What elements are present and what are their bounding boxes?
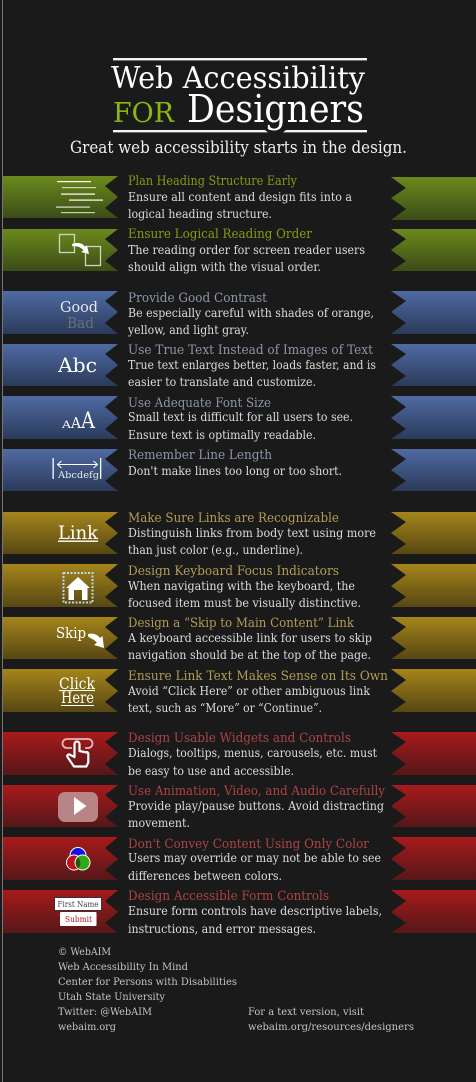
icon: growing letter A [61,409,96,434]
item: Use Animation, Video, and Audio: movement. [128,816,190,830]
item: Design Usable Widgets and Controls: Dialogs, tooltips, menus, carousels, etc. must [128,746,377,760]
footer: WebAIM credits: © WebAIM [58,947,111,958]
icon: click here link: Click [59,674,95,693]
item: Ensure Link Text Makes Sense: text, such as “More” or “Continue”. [128,701,322,715]
item: Ensure Logical Reading Order: Ensure Logical Reading Order [128,227,313,242]
footer: text version link: webaim.org/resources/designers [248,1022,414,1033]
item: Provide Good Contrast: Provide Good Contrast [128,291,268,306]
title block: Web Accessibility [111,61,365,96]
icon: click here link [59,674,95,707]
item: Provide Good Contrast [3,291,476,337]
item: Remember Line Length [3,448,476,491]
item: Make Sure Links are Recognizable: Distinguish links from body text using more [128,526,376,540]
item: Don't Convey Content Using Only Color [3,837,476,883]
icon: focused home [64,573,92,602]
item: Plan Heading Structure Early: logical heading structure. [128,207,272,221]
icon: growing letter A: A [61,420,72,431]
footer: text version link [248,1007,414,1033]
item: Use True Text: True text enlarges better, loads faster, and is [128,358,376,372]
item: Make Sure Links are Recognizable: than just color (e.g., underline). [128,543,303,557]
item: Provide Good Contrast: yellow, and light gray. [127,323,249,337]
item: Make Sure Links are Recognizable [3,511,476,557]
item: Use Animation, Video, and Audio: Use Animation, Video, and Audio Carefully [128,784,386,799]
item: Use Adequate Font Size [3,396,476,442]
item: Design Keyboard Focus Indicators: Design Keyboard Focus Indicators [128,564,339,579]
icon: skip arrow [56,624,104,648]
icon: reading order boxes [60,234,100,266]
item: Skip to Main Content Link: navigation should be at the top of the page. [128,648,371,662]
item: Design Usable Widgets and Controls: be easy to use and accessible. [128,764,294,778]
item: Use Animation, Video, and Audio: Provide play/pause buttons. Avoid distracting [128,799,384,813]
item: Ensure Link Text Makes Sense [3,669,476,715]
item: Use Adequate Font Size: Ensure text is optimally readable. [128,428,316,442]
footer: WebAIM credits: webaim.org [58,1022,117,1033]
title block [111,58,367,132]
item: Use True Text: Use True Text Instead of Images of Text [128,343,374,358]
item: Use True Text [3,343,476,389]
item: Ensure Logical Reading Order [3,227,476,274]
item: Design Keyboard Focus Indicators [3,564,476,610]
item: Design Usable Widgets and Controls [3,731,476,778]
item: Ensure Logical Reading Order: should align with the visual order. [128,260,321,274]
item: Don't Convey Content Using Only Color: Don't Convey Content Using Only Color [128,837,370,852]
icon: growing letter A: A [70,414,81,432]
icon: hand on widget [62,739,92,766]
item: Design Accessible Form Controls: Design Accessible Form Controls [128,889,329,904]
footer: WebAIM credits: Twitter: @WebAIM [58,1007,152,1018]
subtitle: Great web accessibility starts in the design. [70,138,407,157]
icon: heading lines [56,181,103,213]
item: Skip to Main Content Link: A keyboard accessible link for users to skip [127,631,372,645]
icon: click here link: Here [61,688,94,707]
item: Design Keyboard Focus Indicators: When navigating with the keyboard, the [128,579,355,593]
item: Design Accessible Form Controls: Ensure form controls have descriptive labels, [128,904,382,918]
icon: growing letter A: A [80,409,96,434]
item: Ensure Link Text Makes Sense: Ensure Link Text Makes Sense on Its Own [128,669,389,684]
icon: good and bad contrast words [60,298,98,332]
icon: underlined link: Link [58,522,98,544]
icon: form field and submit button: First Name [58,900,99,909]
icon: line length [52,458,101,481]
item: Use True Text: easier to translate and customize. [128,375,316,389]
item: Ensure Logical Reading Order: The reading order for screen reader users [128,243,365,257]
item: Don't Convey Content Using Only Color: differences between colors. [128,869,282,883]
item: Provide Good Contrast: Be especially careful with shades of orange, [128,306,374,320]
item: Plan Heading Structure Early: Ensure all content and design fits into a [128,190,352,204]
icon: form field and submit button: Submit [65,915,93,924]
item: Ensure Link Text Makes Sense: Avoid “Click Here” or other ambiguous link [127,684,371,698]
item: Use Animation, Video, and Audio [3,784,476,830]
title block: FOR [113,98,175,129]
icon: form field and submit button [54,898,102,926]
icon: skip arrow: Skip [56,624,86,642]
item: Skip to Main Content Link: Design a “Skip to Main Content” Link [128,616,354,631]
item: Plan Heading Structure Early: Plan Heading Structure Early [128,174,298,189]
icon: overlapping color circles [66,848,90,870]
icon: video play button [58,792,98,822]
icon: good and bad contrast words: Good [60,298,98,316]
item: Design Usable Widgets and Controls: Design Usable Widgets and Controls [128,731,351,746]
item: Use Adequate Font Size: Use Adequate Font Size [128,396,271,411]
footer: WebAIM credits: Utah State University [58,992,165,1003]
item: Design Accessible Form Controls: instructions, and error messages. [128,922,316,936]
footer: WebAIM credits: Web Accessibility In Mind [58,962,189,973]
item: Design Accessible Form Controls [3,889,476,936]
icon: Abc: Abc [57,353,97,377]
title block: Designers [187,87,364,131]
item: Use Adequate Font Size: Small text is difficult for all users to see. [128,410,353,424]
item: Don't Convey Content Using Only Color: Users may override or may not be able to see [128,851,381,865]
item: Make Sure Links are Recognizable: Make Sure Links are Recognizable [128,511,339,526]
item: Remember Line Length: Remember Line Length [128,448,273,463]
footer: WebAIM credits: Center for Persons with Disabilities [58,977,237,988]
item: Plan Heading Structure Early [3,174,476,221]
footer: WebAIM credits [58,947,237,1033]
item: Remember Line Length: Don't make lines too long or too short. [128,464,342,478]
item: Design Keyboard Focus Indicators: focused item must be visually distinctive. [128,596,361,610]
item: Skip to Main Content Link [3,616,476,662]
footer: text version link: For a text version, visit [248,1007,364,1018]
icon: line length: Abcdefg [57,471,99,481]
icon: good and bad contrast words: Bad [67,314,94,332]
